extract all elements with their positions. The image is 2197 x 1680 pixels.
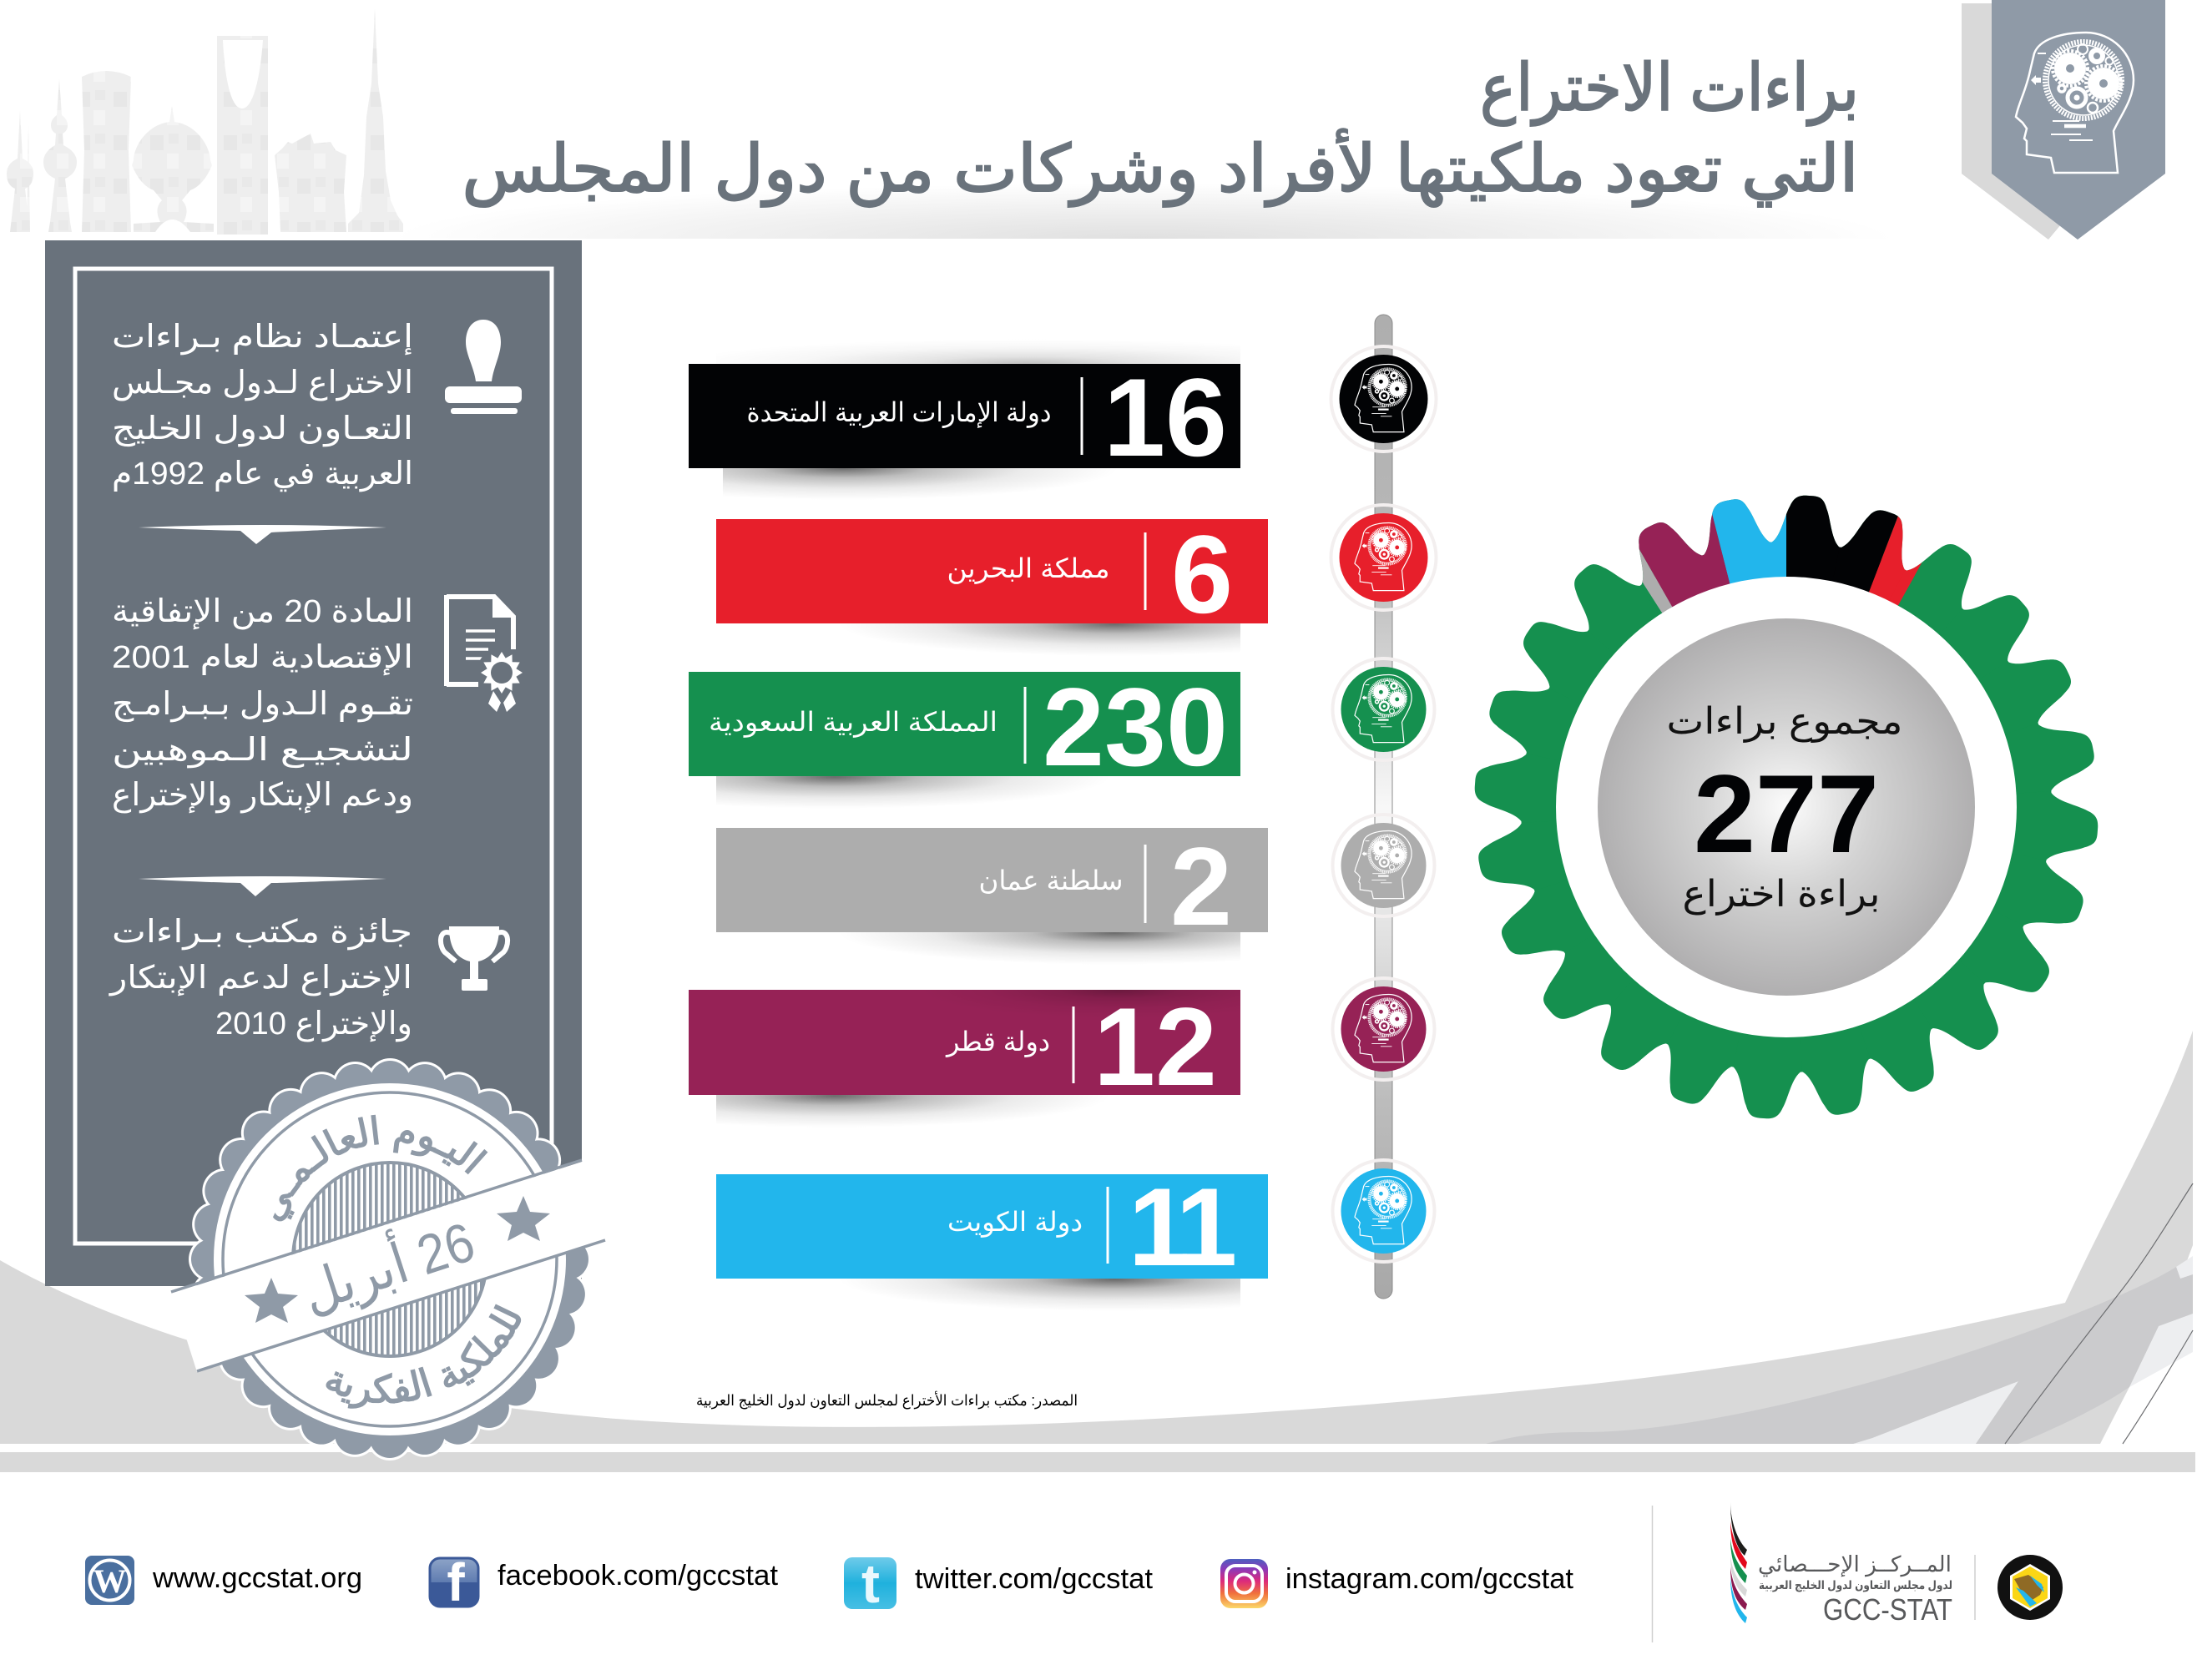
- bar: Bahrain: مملكة البحرين: [947, 553, 1110, 584]
- ribbon with date: [171, 1160, 605, 1372]
- bar: Saudi Arabia: [689, 666, 1240, 790]
- text: fact 2: [112, 594, 413, 814]
- timeline bar: [1375, 315, 1392, 1299]
- bar: Kuwait: دولة الكويت: [947, 1207, 1083, 1238]
- bar: Qatar: 12: [1093, 986, 1217, 1109]
- text: seal top arc: اليـوم العالـمـي: [273, 1115, 487, 1222]
- icon: facebook: [430, 1552, 478, 1612]
- panel: left facts: [45, 240, 582, 1286]
- icon: trophy: [441, 926, 508, 991]
- bar: Kuwait: [716, 1166, 1268, 1289]
- divider 2: [139, 876, 386, 896]
- node: maroon: [1332, 978, 1434, 1080]
- title: [462, 51, 1859, 208]
- text: fact 2: الإقتصادية لعام 2001: [112, 640, 413, 676]
- footer: facebook: [430, 1552, 778, 1612]
- title: براءات الاختراع: [1480, 51, 1859, 127]
- text: fact 1: التعـاون لدول الخليج: [112, 411, 413, 447]
- number: total: 277: [1694, 753, 1879, 876]
- icon: star right: [497, 1196, 550, 1241]
- bar: Qatar: [689, 990, 1240, 1095]
- node: blue: [1332, 1160, 1434, 1262]
- text: fact 1: الاختراع لـدول مجـلس: [112, 366, 413, 401]
- bar: UAE: 16: [1104, 356, 1227, 480]
- footer: facebook: facebook.com/gccstat: [497, 1560, 778, 1592]
- gear total: [1474, 496, 2099, 1118]
- bar: Saudi Arabia: 230: [1043, 666, 1228, 790]
- node: green: [1332, 658, 1434, 760]
- text: fact 1: العربية في عام 1992م: [112, 457, 413, 492]
- text: seal bottom arc: للملكية الفكرية: [326, 1304, 521, 1409]
- text: gear unit: براءة اختراع: [1683, 874, 1880, 916]
- bar: Bahrain: [716, 513, 1268, 637]
- seal: World IP Day: [189, 1058, 588, 1461]
- text: date: 26 أبريل: [293, 1205, 482, 1325]
- bar: UAE: دولة الإمارات العربية المتحدة: [746, 397, 1052, 428]
- text: fact 3: والإختراع 2010: [215, 1006, 412, 1042]
- source note: المصدر: مكتب براءات الأختراع لمجلس التعاون لدول الخليج العربية: [696, 1391, 1078, 1410]
- background swoosh: [0, 1031, 2195, 1472]
- icon: facebook: f: [447, 1552, 465, 1612]
- node: gray: [1332, 815, 1434, 916]
- logo: GCC-STAT: المــركــز الإحـــصائي: [1758, 1551, 1952, 1577]
- bar: Saudi Arabia: المملكة العربية السعودية: [709, 707, 997, 738]
- logo swoosh: [1730, 1502, 1747, 1623]
- icon: stamp: [445, 320, 522, 414]
- title: التي تعود ملكيتها لأفراد وشركات من دول المجلس: [462, 129, 1858, 208]
- text: fact 1: إعتمـاد نظام بـراءات: [112, 320, 413, 356]
- text: fact 3: الإختراع لدعم الإبتكار: [109, 961, 412, 996]
- footer: twitter: twitter.com/gccstat: [915, 1563, 1153, 1595]
- bar: Oman: سلطنة عمان: [978, 865, 1124, 895]
- bar: UAE: [689, 356, 1240, 480]
- footer: instagram: instagram.com/gccstat: [1285, 1563, 1573, 1595]
- icon: wordpress: W: [93, 1562, 127, 1600]
- node: red: [1331, 505, 1436, 610]
- icon: wordpress: [85, 1556, 134, 1605]
- divider 1: [139, 525, 386, 544]
- footer: website: [85, 1556, 362, 1605]
- icon: twitter: [844, 1552, 896, 1614]
- header shadow: [578, 198, 1708, 239]
- logo: GCC emblem: [1998, 1555, 2063, 1620]
- skyline of Gulf landmarks: [7, 9, 403, 235]
- bar: Qatar: دولة قطر: [945, 1027, 1050, 1057]
- icon: twitter: t: [861, 1552, 880, 1614]
- bar: Kuwait: 11: [1129, 1166, 1235, 1289]
- text: fact 3: جائزة مكتب بـراءات: [112, 915, 412, 951]
- bar: Oman: [716, 825, 1268, 949]
- logo: GCC-STAT: [1730, 1502, 1975, 1627]
- icon: star left: [245, 1278, 298, 1323]
- text: fact 3: [109, 915, 412, 1042]
- icon: instagram: [1220, 1559, 1268, 1608]
- icon: document with badge: [447, 595, 527, 712]
- text: gear heading: مجموع براءات: [1666, 701, 1903, 743]
- bar: Oman: 2: [1170, 825, 1232, 949]
- text: fact 2: تقـوم الـدول بـبـرامـج: [112, 687, 413, 723]
- bar shadows: [559, 339, 1390, 1311]
- footer: instagram: [1220, 1559, 1573, 1608]
- footer: twitter: [844, 1552, 1153, 1614]
- logo: GCC-STAT: لدول مجلس التعاون لدول الخليج العربية: [1759, 1578, 1952, 1592]
- logo: GCC-STAT: GCC-STAT: [1823, 1592, 1952, 1627]
- text: fact 1: [112, 320, 413, 492]
- text: fact 2: لتشجيـع الـموهبين: [112, 733, 413, 769]
- node: black: [1331, 346, 1436, 452]
- text: fact 2: ودعم الإبتكار والإختراع: [112, 778, 413, 814]
- text: fact 2: المادة 20 من الإتفاقية: [112, 594, 413, 630]
- bar: Bahrain: 6: [1171, 513, 1233, 637]
- footer: website: www.gccstat.org: [152, 1562, 362, 1594]
- bookmark badge with head icon: [1962, 0, 2165, 240]
